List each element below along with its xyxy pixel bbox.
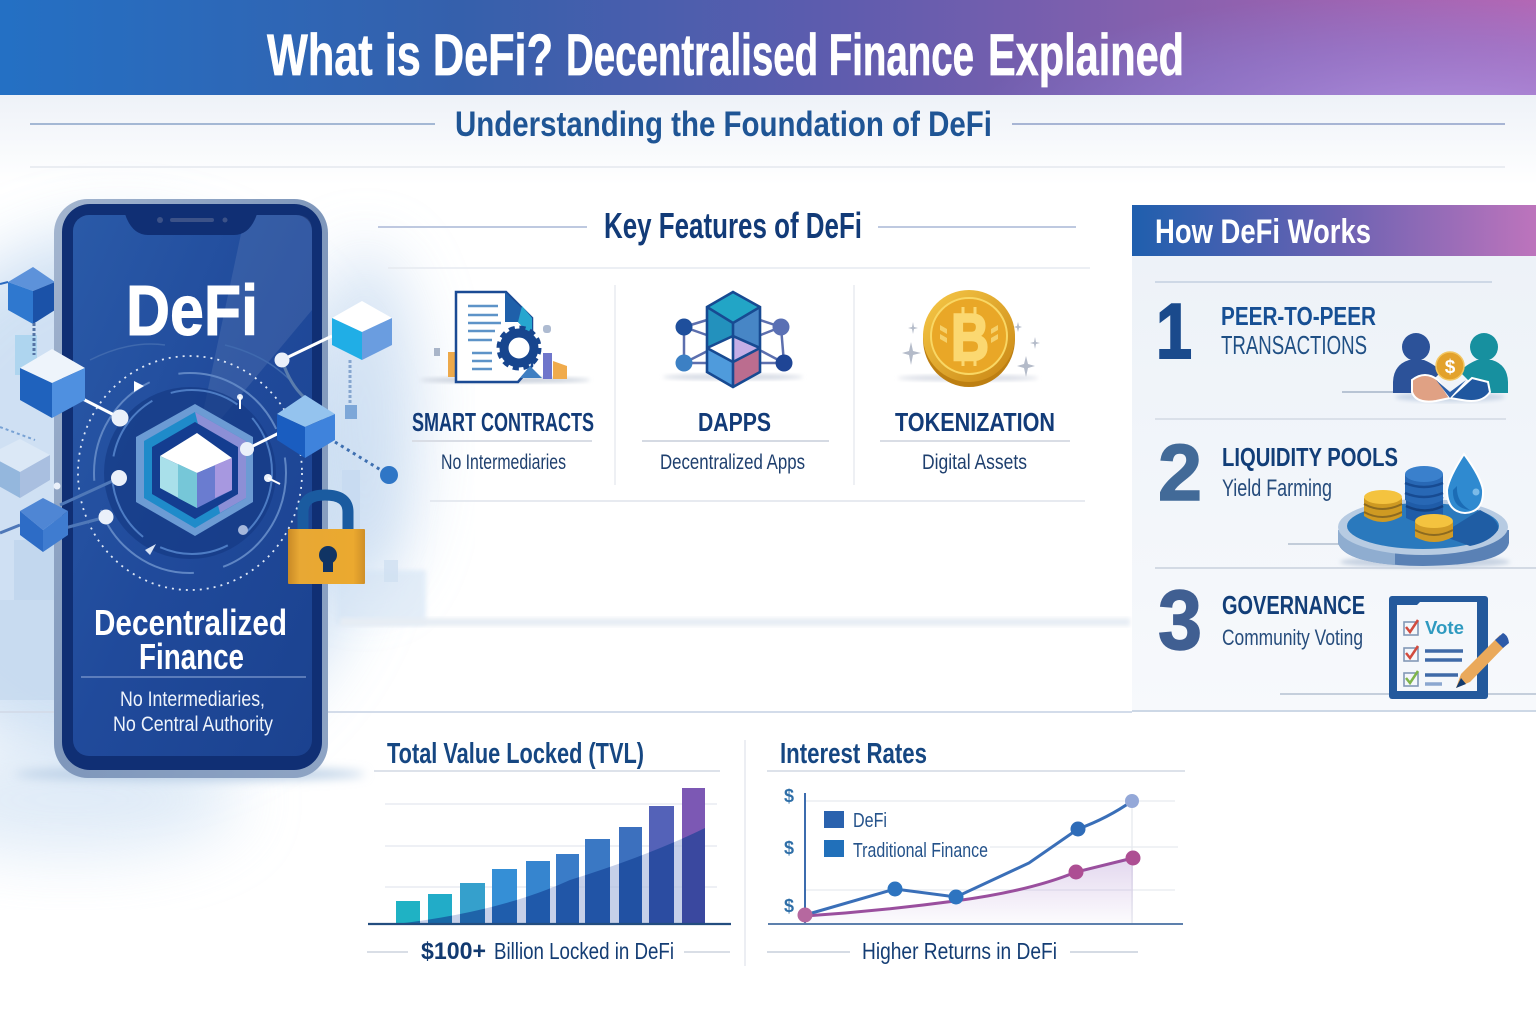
- line chart: [768, 786, 1183, 924]
- floating blockchain cubes behind phone: [0, 267, 55, 498]
- icon: tokenization coin: B: [951, 300, 989, 374]
- step 1: peer-to-peer: 1: [1156, 287, 1192, 375]
- label: tokenization: Digital Assets: [922, 451, 1027, 474]
- label: tokenization: TOKENIZATION: [895, 407, 1055, 437]
- heading: tvl: Total Value Locked (TVL): [387, 738, 644, 770]
- panel: interest rates: [767, 738, 1185, 964]
- label: smart contracts: [412, 407, 594, 474]
- step 2: liquidity pools: 2: [1158, 428, 1202, 517]
- subtitle: Understanding the Foundation of DeFi: [455, 105, 992, 144]
- legend: [824, 810, 988, 862]
- step 1: peer-to-peer: PEER-TO-PEER: [1221, 301, 1376, 331]
- phone label: decentralized finance: Decentralized: [94, 602, 287, 643]
- nodes: [54, 352, 290, 535]
- label: smart contracts: SMART CONTRACTS: [412, 407, 594, 437]
- title banner: [0, 0, 1536, 95]
- heading: key features: Key Features of DeFi: [604, 205, 862, 246]
- cube: upper right: [332, 301, 392, 360]
- caption: tvl: [367, 938, 730, 965]
- step 3: governance: Community Voting: [1222, 625, 1363, 650]
- icon: tokenization coin: [898, 290, 1040, 387]
- legend: Traditional Finance: [853, 840, 988, 862]
- phone label: decentralized finance: [81, 602, 306, 736]
- padlock: [288, 495, 365, 584]
- label: dapps: [642, 407, 829, 474]
- line chart: $: [784, 838, 794, 858]
- line chart: $: [784, 896, 794, 916]
- label: tokenization: [880, 407, 1070, 474]
- step 2: liquidity pools: [1158, 428, 1510, 568]
- line chart: $: [784, 786, 794, 806]
- step 1: peer-to-peer: [1156, 287, 1508, 402]
- cube: right overlapping: [277, 395, 335, 458]
- phone: [54, 199, 365, 778]
- icon: dapps network cube: [663, 292, 803, 387]
- panel: key features: [378, 205, 1090, 501]
- step 3: governance: GOVERNANCE: [1222, 590, 1365, 620]
- cube: left pale: [0, 439, 50, 498]
- step 1: peer-to-peer: TRANSACTIONS: [1221, 330, 1367, 360]
- network nodes and cubes over phone: [0, 301, 398, 552]
- icon: peers exchanging: $: [1445, 357, 1456, 378]
- step 3: governance: 3: [1158, 573, 1202, 667]
- step 2: liquidity pools: Yield Farming: [1222, 475, 1332, 502]
- panel header: [1132, 205, 1536, 256]
- heading: interest rates: Interest Rates: [780, 738, 927, 770]
- icon: vote checklist: [1389, 596, 1509, 699]
- label: dapps: Decentralized Apps: [660, 451, 805, 474]
- label: dapps: DAPPS: [698, 407, 771, 437]
- caption: tvl: Billion Locked in DeFi: [494, 938, 674, 964]
- title: Explained: [988, 23, 1184, 88]
- phone label: decentralized finance: No Intermediaries,: [120, 688, 265, 711]
- step 3: governance: [1158, 573, 1536, 699]
- panel: total value locked: [367, 738, 731, 965]
- cube: lower left small: [20, 498, 68, 552]
- icon: smart contract document: [420, 292, 590, 383]
- caption: interest rates: Higher Returns in DeFi: [862, 938, 1057, 964]
- title: Decentralised Finance: [566, 23, 974, 88]
- bar chart: [368, 788, 731, 924]
- title: What is DeFi?: [267, 23, 553, 88]
- legend: DeFi: [853, 810, 887, 832]
- icon: peers exchanging: [1393, 333, 1508, 402]
- background glow behind phone: [0, 230, 1130, 855]
- phone heading: DeFi: DeFi: [126, 272, 258, 351]
- phone shadow: [15, 767, 365, 781]
- panel: how defi works: [1132, 205, 1536, 712]
- label: smart contracts: No Intermediaries: [441, 451, 566, 474]
- cube: top-left: [8, 267, 55, 324]
- icon: vote checklist: Vote: [1425, 618, 1464, 638]
- central hexagon with cube: [136, 404, 253, 536]
- phone label: decentralized finance: Finance: [139, 636, 244, 677]
- panel header: How DeFi Works: [1155, 213, 1371, 251]
- step 2: liquidity pools: LIQUIDITY POOLS: [1222, 442, 1398, 472]
- network rings: [78, 344, 302, 590]
- icon: liquidity pool: [1338, 454, 1510, 568]
- phone label: decentralized finance: No Central Authority: [113, 713, 273, 736]
- cube: upper left white: [20, 349, 85, 418]
- title: [267, 23, 1184, 88]
- caption: tvl: $100+: [421, 938, 486, 965]
